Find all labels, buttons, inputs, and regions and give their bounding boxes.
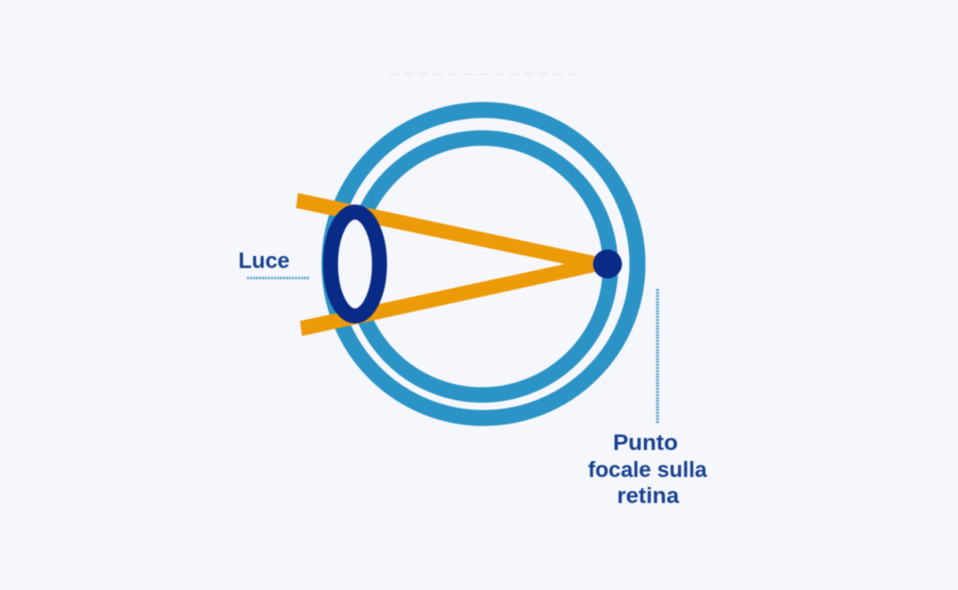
- label: focal point: Punto: [613, 430, 678, 455]
- eye inner ring: [354, 138, 610, 395]
- label: Luce: Luce: [238, 248, 290, 273]
- light rays: [296, 193, 595, 336]
- lens: [330, 212, 380, 316]
- leader line: focal point: [656, 289, 659, 424]
- faint cropped title remnant: [389, 73, 578, 75]
- eye outer ring: [330, 110, 638, 418]
- leader line: Luce: [247, 277, 310, 279]
- label: focal point: focale sulla: [588, 457, 708, 482]
- label: focal point: retina: [617, 483, 680, 508]
- focal point on retina: [593, 250, 622, 278]
- label: focal point: [588, 289, 713, 508]
- label: Luce: [238, 248, 310, 278]
